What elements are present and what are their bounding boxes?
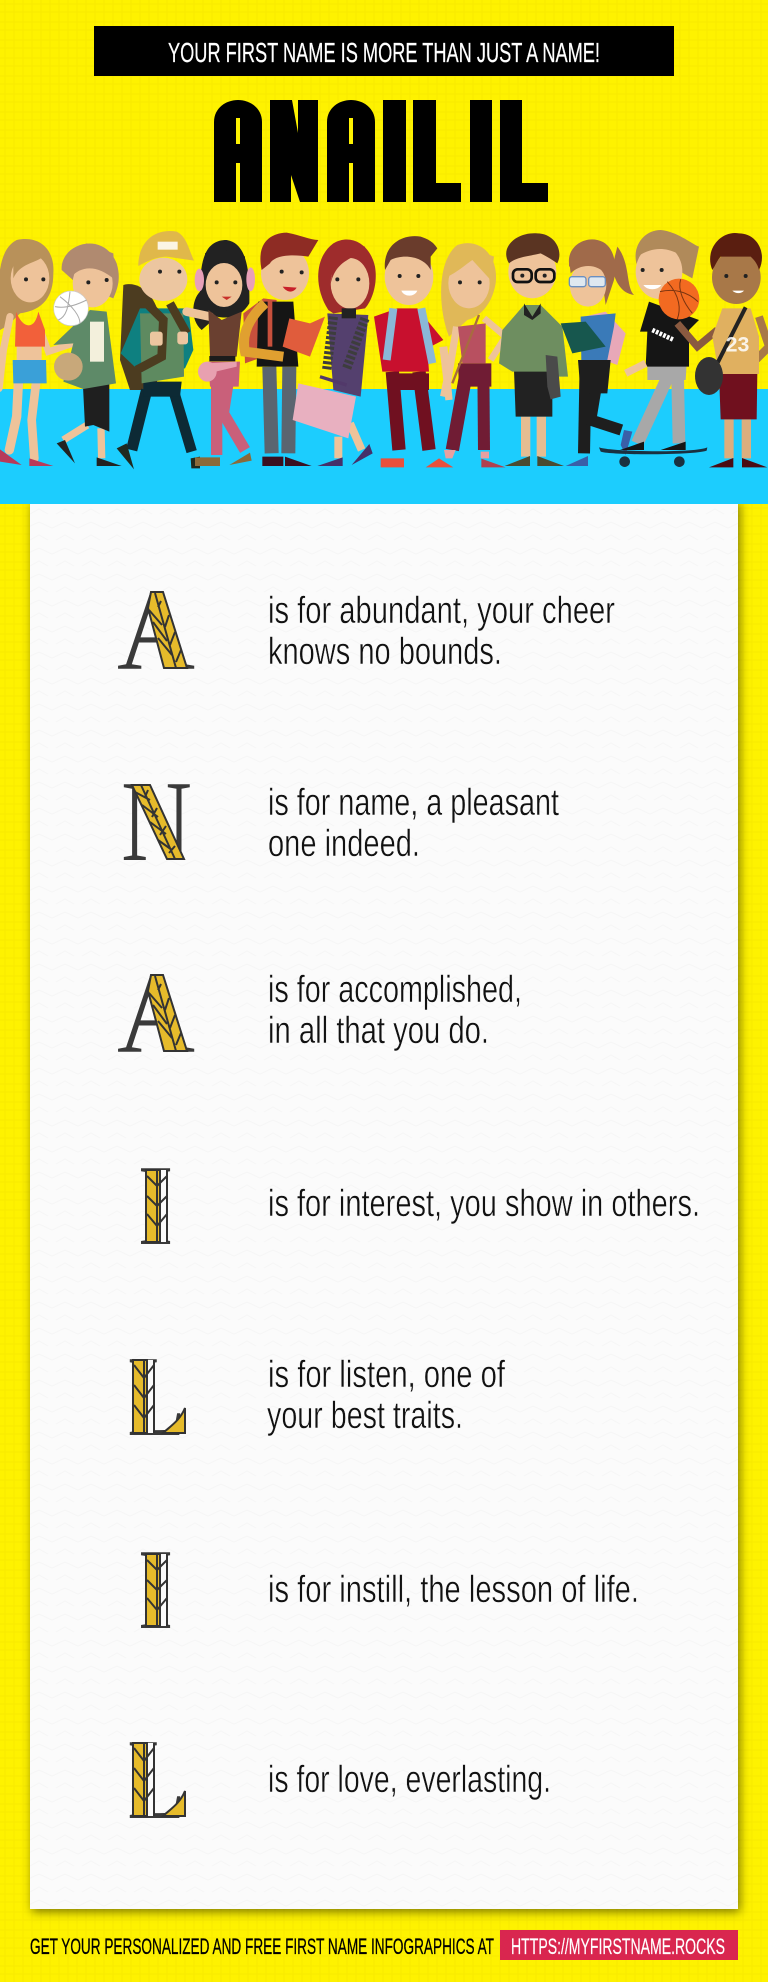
person 2: girl in green jacket with volleyball bbox=[53, 243, 122, 466]
person 7: boy in red tee bbox=[374, 236, 453, 467]
row 1: letter A: knows no bounds. bbox=[268, 631, 502, 673]
row 7: letter L bbox=[127, 1716, 551, 1844]
row 6: letter I bbox=[137, 1526, 639, 1654]
title name: A bbox=[331, 85, 371, 221]
person 12: boy with basketball tank top: 23 bbox=[726, 333, 750, 357]
row 5: letter L: L bbox=[127, 1333, 186, 1461]
title name: L bbox=[501, 85, 521, 221]
row 5: letter L: your best traits. bbox=[267, 1395, 463, 1437]
person 12: boy with basketball tank top bbox=[695, 233, 768, 467]
letter card bbox=[30, 500, 738, 1909]
title name bbox=[214, 85, 548, 221]
title name: A bbox=[218, 85, 258, 221]
title name: N bbox=[274, 85, 314, 221]
illustration: group of students, right half bbox=[374, 230, 768, 467]
row 1: letter A bbox=[117, 567, 615, 695]
row 2: letter N bbox=[121, 758, 559, 886]
person 9: boy with glasses and folder bbox=[499, 233, 568, 466]
header banner bbox=[94, 26, 674, 76]
person 3: boy with cap and backpack bbox=[117, 231, 200, 469]
row 4: letter I bbox=[137, 1142, 700, 1270]
person 6: girl with pink bag bbox=[293, 239, 376, 466]
title name: I bbox=[386, 85, 403, 221]
row 5: letter L bbox=[127, 1333, 505, 1461]
title name: I bbox=[472, 85, 490, 221]
footer call to action: GET YOUR PERSONALIZED AND FREE FIRST NAME INFOGRAPHICS AT bbox=[30, 1934, 494, 1959]
row 7: letter L: L bbox=[127, 1716, 186, 1844]
row 4: letter I: I bbox=[137, 1142, 174, 1270]
blue floor band bbox=[0, 389, 768, 504]
row 6: letter I: I bbox=[137, 1526, 174, 1654]
person 11: skater boy with basketball bbox=[599, 230, 717, 467]
person 8: blonde girl bbox=[441, 243, 506, 467]
row 1: letter A: is for abundant, your cheer bbox=[268, 590, 615, 632]
illustration: group of students, left half bbox=[0, 231, 376, 469]
row 3: letter A: in all that you do. bbox=[268, 1010, 489, 1052]
row 1: letter A: A bbox=[117, 567, 195, 695]
row 2: letter N: is for name, a pleasant bbox=[268, 782, 559, 824]
row 2: letter N: N bbox=[121, 758, 192, 886]
row 3: letter A: A bbox=[117, 950, 195, 1078]
row 7: letter L: is for love, everlasting. bbox=[268, 1759, 551, 1801]
person 4: girl with headphones bbox=[187, 240, 255, 466]
title name: L bbox=[414, 85, 434, 221]
row 5: letter L: is for listen, one of bbox=[268, 1354, 505, 1396]
person 10: girl with ponytail and tablet bbox=[561, 239, 634, 466]
row 3: letter A bbox=[117, 950, 522, 1078]
person 1: girl in orange top bbox=[0, 239, 78, 466]
row 2: letter N: one indeed. bbox=[268, 823, 420, 865]
person 5: boy reading a book bbox=[243, 233, 325, 466]
row 6: letter I: is for instill, the lesson of life. bbox=[268, 1569, 639, 1611]
row 3: letter A: is for accomplished, bbox=[268, 969, 522, 1011]
